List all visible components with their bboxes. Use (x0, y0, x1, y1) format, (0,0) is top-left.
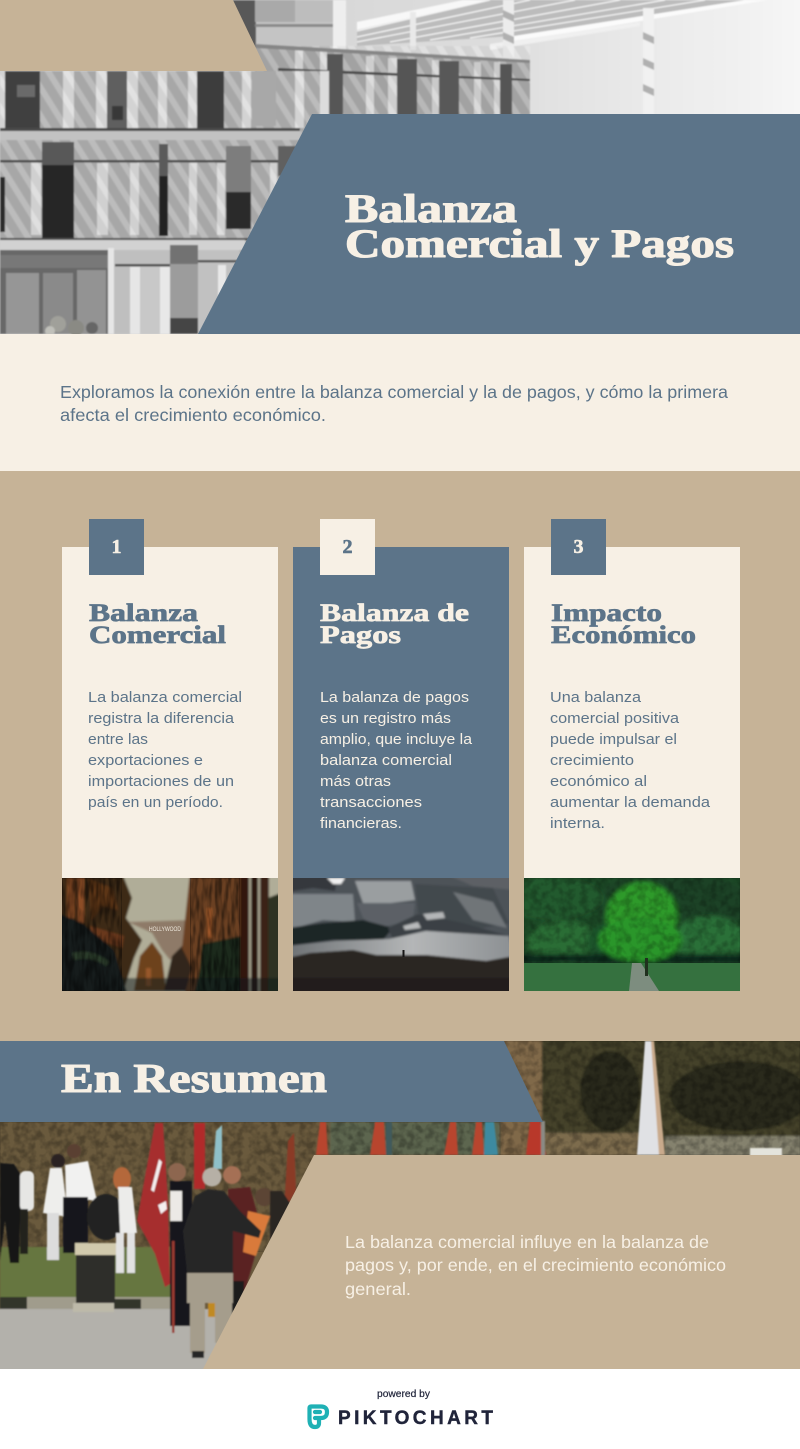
summary photo: parade with flags (0, 1041, 800, 1369)
white flag (637, 1041, 664, 1155)
summary heading: En Resumen (61, 1055, 327, 1101)
hiker (402, 950, 404, 957)
summary text: pagos y, por ende, en el crecimiento económico (345, 1255, 726, 1275)
card 1 photo: palms and Hollywood sign (62, 878, 278, 991)
card 1 heading: Comercial (89, 622, 226, 649)
intro text (60, 382, 728, 425)
card 3 heading: Económico (551, 622, 696, 649)
card 2 heading: Pagos (320, 622, 401, 649)
number tab 1: 1 (112, 536, 122, 558)
trunk (645, 958, 648, 976)
round black case (87, 1194, 125, 1240)
card 2 text: transacciones (320, 794, 422, 811)
card 3 text: comercial positiva (550, 710, 680, 727)
number tab 3: 3 (574, 536, 584, 558)
card 1 text: exportaciones e (88, 752, 203, 769)
man from behind (183, 1168, 261, 1358)
number tab 2: 2 (342, 536, 352, 558)
card 3 text: crecimiento (550, 752, 634, 769)
card 2 heading (320, 600, 469, 649)
far-left man (0, 1163, 25, 1263)
card 3 photo: green tree (524, 878, 740, 991)
card 2 text: balanza comercial (320, 752, 452, 769)
card 1 text (88, 689, 242, 811)
icon: Piktochart logo (310, 1406, 327, 1427)
hollywood sign: HOLLYWOOD (149, 926, 181, 933)
card 1 text: país en un período. (88, 794, 223, 811)
card 2 text: La balanza de pagos (320, 689, 469, 706)
powered by: powered by (377, 1388, 431, 1400)
card 3: Impacto Economico (504, 519, 754, 1001)
card 2 heading: Balanza de (320, 600, 469, 627)
card 3 text: Una balanza (550, 689, 642, 706)
card 3 text (550, 689, 711, 832)
intro text: afecta el crecimiento económico. (60, 405, 326, 425)
Turkish flag (137, 1123, 170, 1287)
title panel (198, 114, 800, 334)
card 2 text: financieras. (320, 815, 402, 832)
distant flags (526, 1121, 546, 1155)
title: Comercial y Pagos (345, 221, 734, 266)
card 1 heading: Balanza (89, 600, 199, 627)
footer: powered by Piktochart (0, 1369, 800, 1449)
card 1 text: registra la diferencia (88, 710, 235, 727)
card 3 text: aumentar la demanda (550, 794, 711, 811)
card 2 text (320, 689, 473, 832)
grass, curb and road (0, 1247, 175, 1299)
path (629, 963, 659, 991)
card 1 text: entre las (88, 731, 148, 748)
summary text: La balanza comercial influye en la balanza de (345, 1232, 709, 1252)
card 1 text: importaciones de un (88, 773, 234, 790)
summary text (345, 1232, 726, 1299)
card 2 text: más otras (320, 773, 391, 790)
card 3 text: interna. (550, 815, 605, 832)
card 2 photo: snowy mountain (293, 878, 509, 991)
card 1 text: La balanza comercial (88, 689, 242, 706)
hero photo: building (0, 0, 800, 334)
title: Balanza (345, 186, 517, 231)
tan corner shape (0, 0, 267, 71)
card 2: Balanza de Pagos (288, 519, 514, 996)
red sweater man (223, 1166, 262, 1321)
woman and orange sign (243, 1188, 292, 1256)
card 2 text: es un registro más (320, 710, 451, 727)
title (345, 186, 734, 266)
redhead woman (113, 1167, 137, 1273)
summary heading panel (0, 1041, 543, 1122)
trash can (73, 1243, 116, 1312)
number tab 2 (320, 519, 375, 575)
card 1 heading (89, 600, 226, 649)
card 3 text: económico al (550, 773, 647, 790)
man holding flag (168, 1163, 192, 1333)
intro text: Exploramos la conexión entre la balanza comercial y la de pagos, y cómo la primera (60, 382, 728, 402)
number tab 1 (89, 519, 144, 575)
field (524, 963, 740, 991)
man in white shirt (63, 1144, 97, 1253)
summary text panel (203, 1155, 800, 1369)
intro band (0, 334, 800, 471)
card 3 heading: Impacto (551, 600, 662, 627)
tan section background (0, 471, 800, 1041)
card 1: Balanza Comercial (57, 519, 283, 996)
card 3 text: puede impulsar el (550, 731, 677, 748)
woman in white (43, 1154, 68, 1260)
number tab 3 (551, 519, 606, 575)
card 2 text: amplio, que incluye la (320, 731, 473, 748)
card 3 heading (551, 600, 696, 649)
summary text: general. (345, 1279, 411, 1299)
wordmark: PIKTOCHART (338, 1408, 493, 1429)
